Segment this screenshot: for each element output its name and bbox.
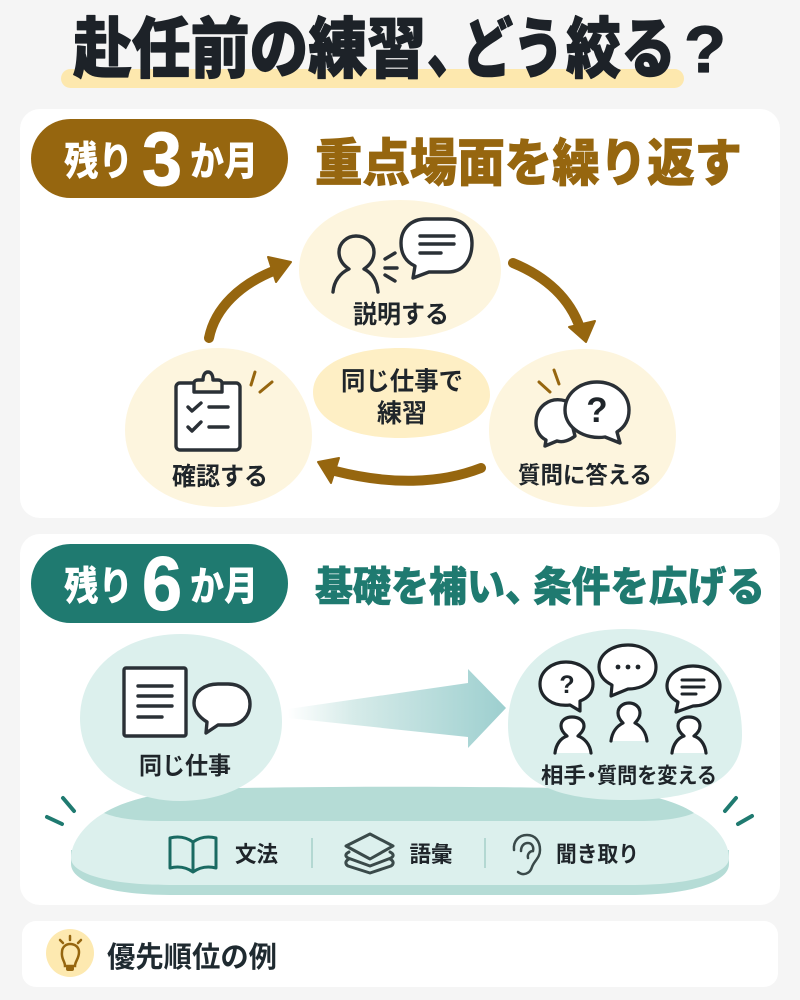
- icon: document: [124, 668, 186, 736]
- badge: 残り3か月: 3: [142, 117, 182, 202]
- icon: three people: [555, 703, 706, 753]
- blob: 同じ仕事: [80, 634, 282, 801]
- icon: light bulb: [46, 929, 94, 977]
- step: 説明する: 説明する: [353, 301, 449, 329]
- label: 文法: 文法: [235, 842, 278, 867]
- panel: 残り6か月: [20, 534, 780, 905]
- icon: clipboard: [176, 372, 240, 450]
- blob: 同じ仕事: 同じ仕事: [139, 753, 231, 780]
- step: 確認する: [125, 348, 312, 507]
- step: 説明する: [299, 200, 501, 338]
- title: 、: [427, 12, 477, 86]
- badge: 残り3か月: [31, 117, 288, 202]
- callout: 同じ仕事で練習: 練習: [377, 400, 427, 428]
- icon: lines bubble: [667, 666, 720, 712]
- step: 確認する: 確認する: [172, 463, 268, 491]
- callout: 同じ仕事で練習: 同じ仕事で: [341, 368, 463, 396]
- label: 語彙: 語彙: [410, 842, 452, 867]
- blob: 相手・質問を変える: [508, 629, 742, 800]
- icon: sparks: [251, 372, 272, 392]
- icon: sparks: [47, 798, 752, 824]
- foundation platform: [71, 787, 729, 895]
- label: question mark: ?: [559, 671, 575, 699]
- label: 相手・質問を変える: ・: [581, 764, 602, 788]
- icon: speech bubble: [194, 684, 250, 733]
- heading: 基礎を補い、条件を広げる: 基礎を補い: [315, 564, 505, 610]
- icon: question bubbles: [536, 382, 629, 446]
- badge: 残り3か月: か月: [190, 140, 258, 184]
- title: ?: [684, 12, 726, 86]
- heading: 基礎を補い、条件を広げる: 条件を広げる: [533, 564, 765, 610]
- icon: dots bubble: [599, 645, 656, 696]
- arrow: 質問に答える to 確認する: [318, 458, 481, 483]
- icon: sparks: [539, 370, 559, 392]
- arrow: 確認する to 説明する: [209, 257, 291, 338]
- title: 絞る: [566, 12, 676, 86]
- badge: 残り6か月: 6: [142, 542, 182, 627]
- text: 優先順位の例: 優先順位の例: [107, 941, 277, 974]
- title: 赴任前の練習: [73, 12, 426, 86]
- icon: question bubble: [540, 662, 593, 711]
- label: 聞き取り: 聞き取り: [556, 842, 639, 867]
- badge: 残り3か月: 残り: [64, 140, 133, 184]
- label: 相手・質問を変える: [541, 764, 717, 788]
- icon: stacked layers: [346, 834, 393, 873]
- panel: 残り3か月: [20, 109, 780, 518]
- heading: 基礎を補い、条件を広げる: [315, 564, 765, 610]
- arrow: wedge to 相手・質問を変える: [288, 669, 506, 748]
- icon: ear: [514, 835, 540, 874]
- panel: 優先順位の例: [22, 921, 778, 987]
- step: 質問に答える: ?: [586, 391, 608, 430]
- heading: 基礎を補い、条件を広げる: 、: [505, 564, 543, 610]
- label: 相手・質問を変える: 相手: [541, 764, 586, 788]
- icon: person speaking: [333, 219, 472, 292]
- badge: 残り6か月: 残り: [64, 565, 133, 609]
- arrow: 説明する to 質問に答える: [513, 263, 595, 342]
- label: 相手・質問を変える: 質問を変える: [597, 764, 717, 788]
- heading: 重点場面を繰り返す: 重点場面を繰り返す: [315, 135, 742, 192]
- title: どう: [462, 12, 564, 86]
- step: 質問に答える: 質問に答える: [518, 462, 652, 488]
- title: [61, 12, 726, 88]
- badge: 残り6か月: [31, 542, 288, 627]
- badge: 残り6か月: か月: [190, 565, 258, 609]
- callout: 同じ仕事で練習: [313, 348, 490, 438]
- icon: book: [170, 837, 216, 872]
- step: 質問に答える: [489, 349, 676, 507]
